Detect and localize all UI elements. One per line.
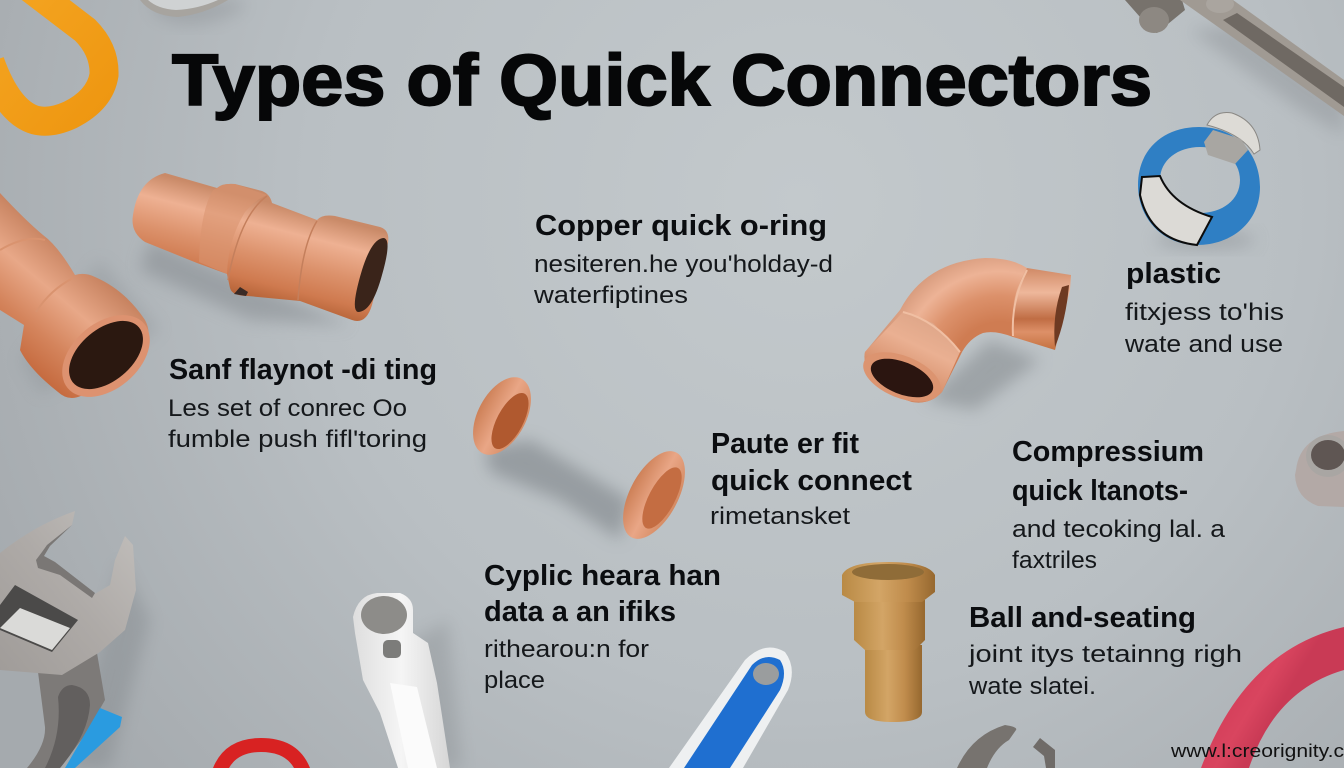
icon: copper coupling: [132, 173, 388, 321]
icon: red ring: [213, 738, 310, 768]
icon: bottom tool: [957, 725, 1055, 768]
text block: Cyplic heara: [484, 560, 721, 694]
text block: Compressium: Compressium: [1012, 436, 1204, 468]
text block: Compressium: quick ltanots-: [1012, 475, 1188, 507]
icon: blue tool: [669, 648, 792, 768]
icon: copper elbow: [856, 258, 1071, 412]
website URL: www.l:creorignity.c: [1170, 741, 1344, 761]
text block: Sanf flaynot: [168, 354, 437, 453]
text block: Compressium: and tecoking lal. a: [1012, 516, 1226, 543]
icon: wrench top right: [1125, 0, 1344, 135]
icon: shadow between rings: [485, 440, 630, 540]
text block: Ball and-seating: [968, 602, 1242, 700]
text block: Ball and-seating: wate slatei.: [968, 673, 1096, 700]
icon: copper ring left: [461, 368, 543, 464]
text block: Copper quick o-ring: nesiteren.he you'holday-d: [534, 251, 833, 278]
icon: gray nut right edge: [1295, 431, 1344, 507]
icon: blue ring connector: [1138, 112, 1260, 249]
text block: plastic: [1124, 258, 1284, 358]
icon: brass fitting: [842, 562, 935, 722]
text block: Paute er fit: Paute er fit: [711, 428, 859, 460]
text block: Paute er fit: [710, 428, 912, 530]
text block: plastic: plastic: [1126, 258, 1221, 290]
text block: Copper quick o-ring: Copper quick o-ring: [535, 210, 827, 242]
text block: plastic: wate and use: [1124, 331, 1283, 358]
text block: Copper quick o-ring: waterfiptines: [533, 282, 688, 309]
icon: metal piece top: [140, 0, 245, 25]
text block: Sanf flaynot: fumble push fifl'toring: [168, 426, 427, 453]
text block: Ball and-seating: joint itys tetainng righ: [968, 641, 1242, 668]
text block: Cyplic heara: Cyplic heara han: [484, 560, 721, 592]
text block: Cyplic heara: rithearou:n for: [484, 636, 649, 663]
text block: Cyplic heara: data a an ifiks: [484, 596, 676, 628]
text block: Compressium: [1012, 436, 1226, 574]
icon: red hose: [1201, 627, 1344, 768]
text block: Paute er fit: quick connect: [711, 465, 912, 497]
text block: Ball and-seating: Ball and-seating: [969, 602, 1196, 634]
icon: copper coupling shadow: [140, 240, 350, 325]
icon: orange hook: [0, 0, 104, 121]
text block: Compressium: faxtriles: [1012, 547, 1097, 574]
text block: Cyplic heara: place: [484, 667, 545, 694]
text block: Sanf flaynot: Sanf flaynot -di ting: [169, 354, 437, 386]
icon: copper fitting left: [0, 193, 166, 413]
text block: plastic: fitxjess to'his: [1125, 299, 1284, 326]
icon: white tool: [353, 593, 462, 768]
icon: adjustable wrench: [0, 511, 150, 768]
text block: Paute er fit: rimetansket: [710, 503, 850, 530]
text block: Copper quick o-ring: [533, 210, 833, 309]
icon: copper ring right: [610, 441, 698, 549]
text block: Sanf flaynot: Les set of conrec Oo: [168, 395, 407, 422]
title: Types of Quick Connectors: [172, 41, 1152, 121]
icon: blue handle: [65, 708, 122, 768]
